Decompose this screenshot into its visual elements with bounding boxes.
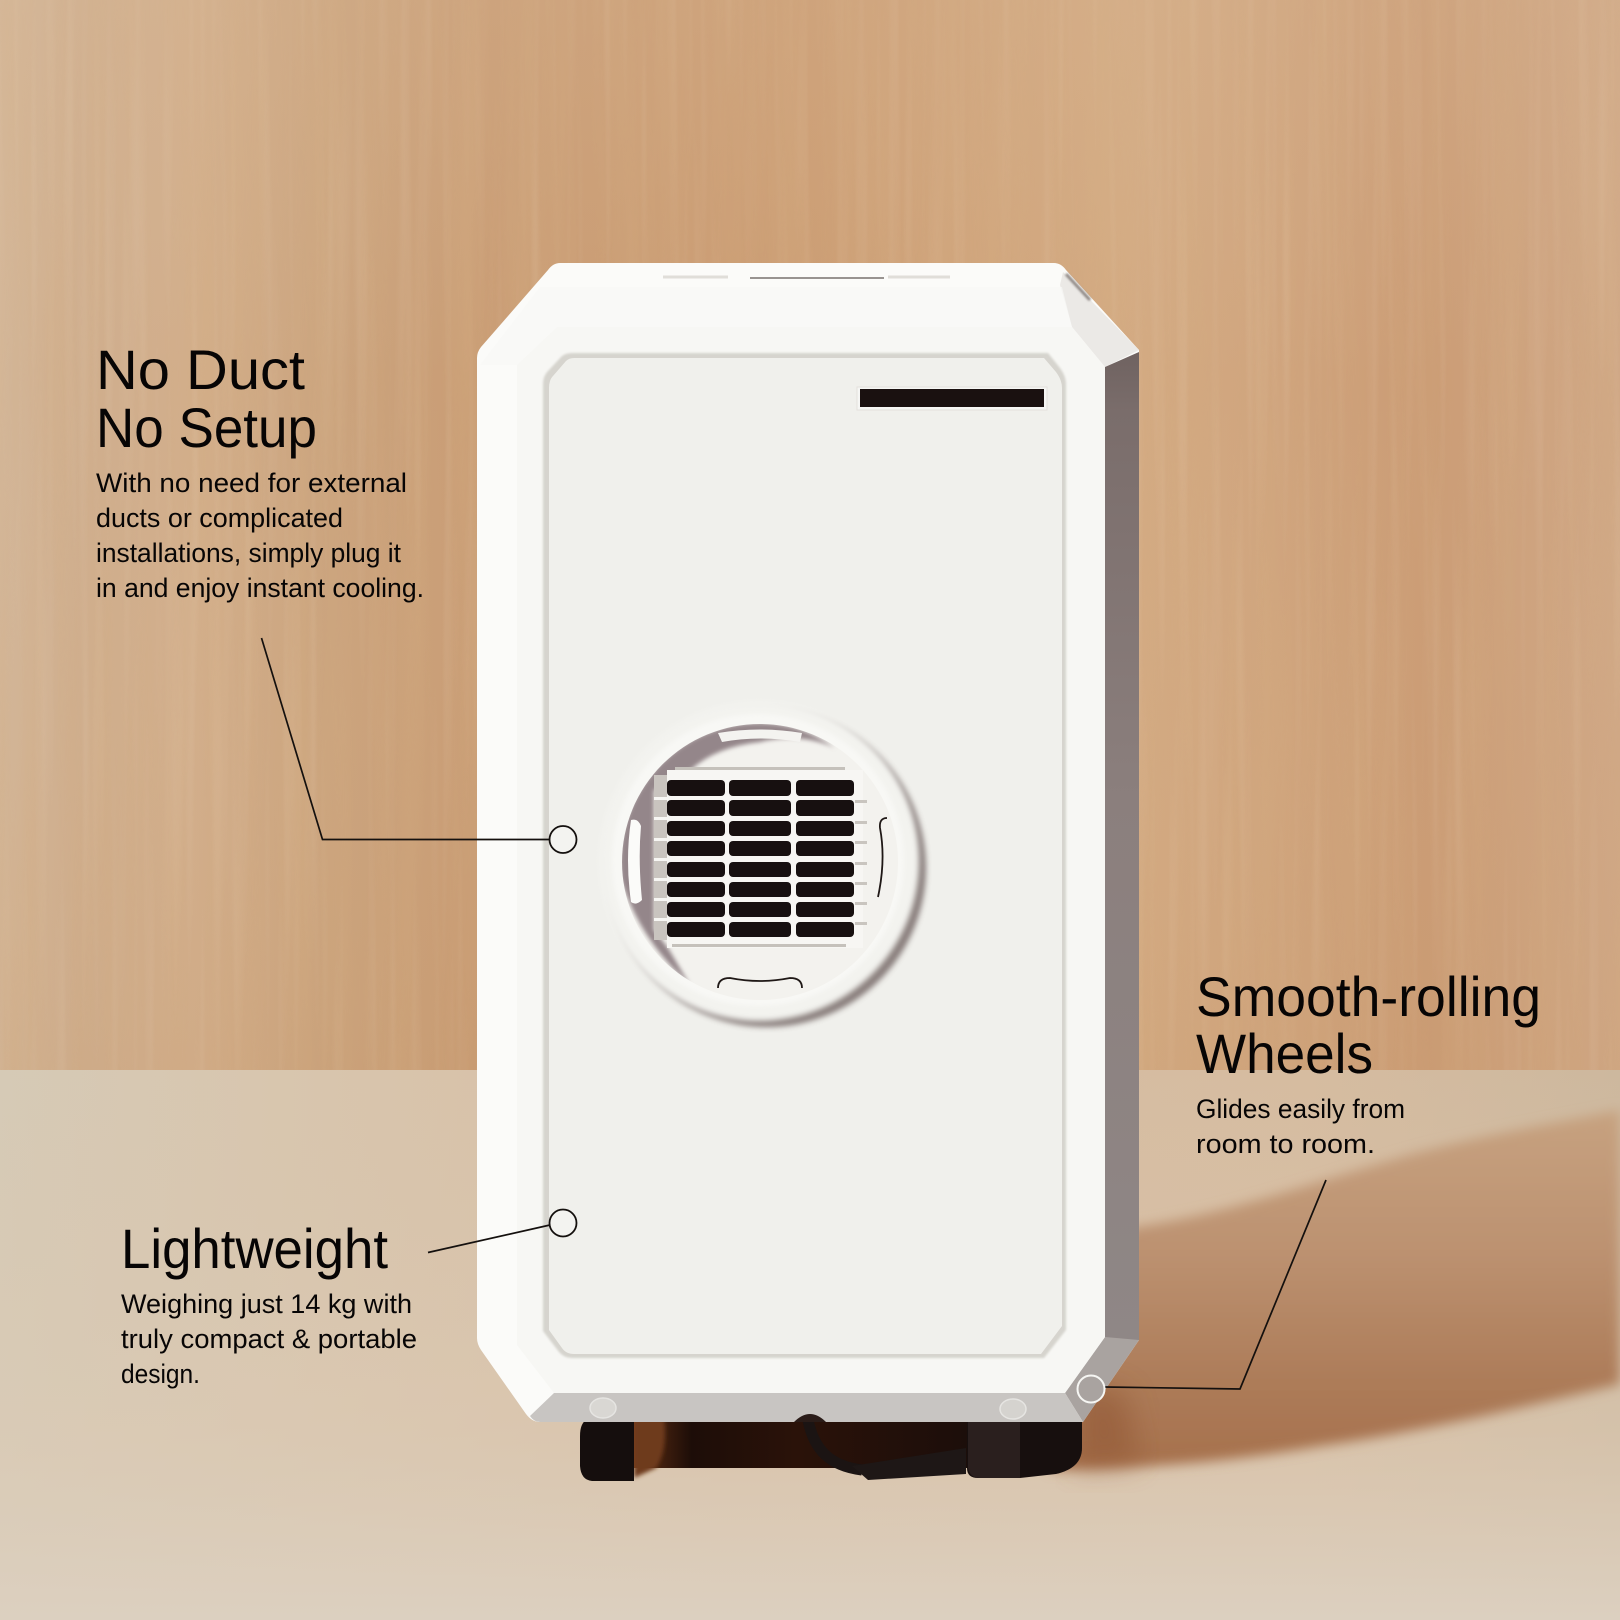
bottom gray ledge [530,1393,1083,1422]
left wheel [580,1420,634,1481]
housing silhouette [477,263,1139,1422]
leader: lightweight [428,1210,576,1252]
body text: installations, simply plug it [96,538,401,568]
callout: smooth-rolling wheels [1196,965,1541,1159]
leader: wheels [1078,1180,1326,1402]
right bar ends [855,800,867,925]
body text [121,1289,417,1389]
intake ring crescent shadow [608,709,926,1027]
wheels and cable under the unit [580,1418,1082,1481]
leader: no duct [262,638,576,853]
front panel groove [543,353,1066,1358]
cable notch [794,1414,826,1422]
intake ring [599,701,919,1021]
heading [96,338,317,459]
side panel [1105,352,1139,1340]
power cable [808,1420,966,1480]
top right chamfer facet [1060,272,1139,367]
callout: lightweight [121,1217,417,1389]
grille left stubs [654,775,667,940]
body text [1196,1094,1405,1159]
front panel face [549,358,1062,1354]
inner shadow crescent [620,723,835,985]
screw right [1000,1399,1026,1419]
top edge vent details [663,277,950,278]
heading: No Duct [96,338,305,401]
heading: Lightweight [121,1217,388,1280]
body text: Glides easily from [1196,1094,1405,1124]
body text [96,468,424,603]
wood wall background [0,0,1620,1070]
right tab line [878,818,887,897]
front bezel [517,327,1105,1393]
bottom tab line [718,978,802,988]
screw left [590,1398,616,1418]
grille white bars [654,797,668,921]
body text: With no need for external [96,468,407,498]
lower side corner [1065,1337,1139,1422]
slot rows [667,780,854,937]
round air intake [599,701,926,1027]
intake opening [622,724,898,1000]
body text: in and enjoy instant cooling. [96,573,424,603]
grille plate [667,770,696,948]
display slot [857,387,1047,410]
floor surface [0,1070,1620,1620]
air conditioner body [477,263,1139,1422]
callout: smooth-rolling wheels: Wheels [1196,1022,1373,1085]
body text: room to room. [1196,1129,1375,1159]
cast shadow on floor [1050,1110,1620,1470]
body text: truly compact & portable [121,1324,417,1354]
body text: design. [121,1359,200,1389]
heading: Smooth-rolling [1196,965,1541,1028]
heading: No Setup [96,396,317,459]
right wheel with bracket [967,1420,1082,1478]
body text: ducts or complicated [96,503,343,533]
body text: Weighing just 14 kg with [121,1289,412,1319]
callout: no duct [96,338,424,603]
top band shade [480,287,1072,365]
left tab [628,820,642,904]
top tab [718,730,802,742]
